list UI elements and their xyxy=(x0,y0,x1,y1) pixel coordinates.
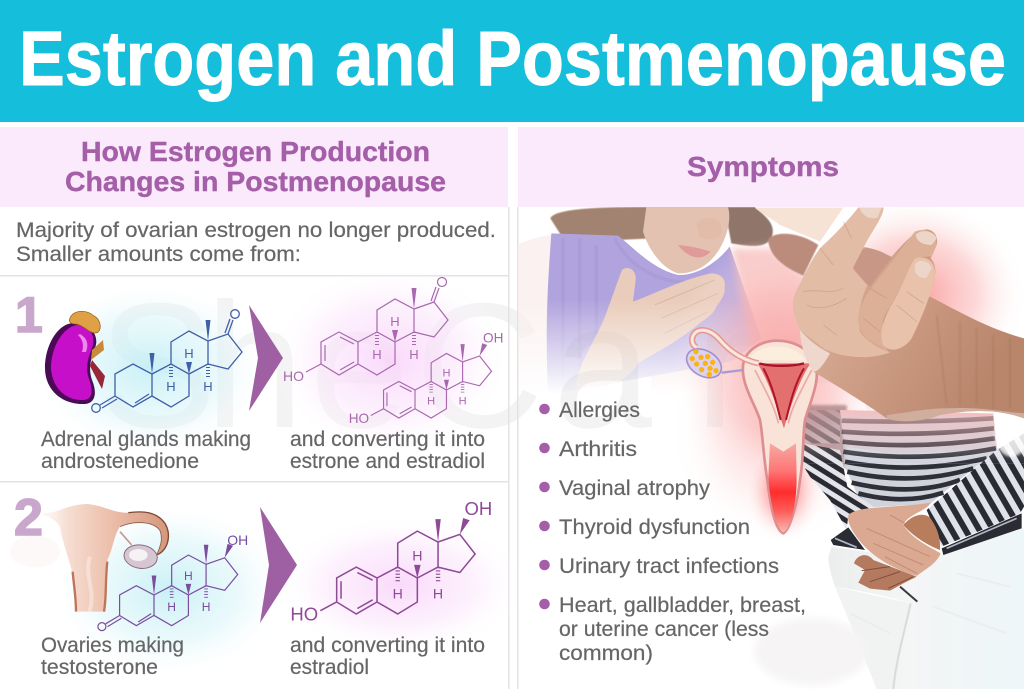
skin wrinkles xyxy=(803,222,923,335)
caption: converting to estradiol: and converting it into xyxy=(290,634,485,657)
title banner xyxy=(0,0,1024,122)
panel: how estrogen production changes xyxy=(0,127,525,689)
palm xyxy=(793,208,890,357)
symptoms list xyxy=(539,399,806,665)
molecule: testosterone: H xyxy=(202,600,210,614)
molecule: estradiol large: H xyxy=(433,587,443,603)
middle finger xyxy=(858,230,936,352)
pale thumb base xyxy=(800,330,830,372)
bullet: cancers xyxy=(539,594,806,665)
nails xyxy=(859,208,937,278)
pale forearm at top xyxy=(755,208,843,242)
heading band: symptoms: Symptoms xyxy=(687,151,839,182)
caption: converting to estrone and estradiol: and converting it into xyxy=(290,428,485,451)
icon: kidney and adrenal gland xyxy=(45,311,105,404)
arrow xyxy=(249,305,283,411)
photo collage xyxy=(518,195,1024,689)
red glow behind hand xyxy=(801,195,1024,395)
intro text: Smaller amounts come from: xyxy=(16,243,301,266)
arrow xyxy=(260,507,297,623)
number 2: 2 xyxy=(14,489,43,547)
heading band left: Changes in Postmenopause xyxy=(65,166,446,197)
woman with scarf xyxy=(518,207,773,395)
step 1 xyxy=(15,265,510,473)
pale lower edge of arm xyxy=(887,408,1024,421)
bullet: allergies: Allergies xyxy=(559,399,640,422)
molecule: testosterone: H xyxy=(184,569,193,583)
heading band left xyxy=(0,127,508,207)
intro text: Majority of ovarian estrogen no longer produced. xyxy=(16,219,496,242)
molecule: estradiol: H xyxy=(427,395,435,407)
step 2 xyxy=(10,489,525,679)
caption: converting to estrone and estradiol xyxy=(290,428,485,473)
watermark: SheCares xyxy=(98,266,949,465)
bullet: cancers: or uterine cancer (less xyxy=(559,618,769,641)
intro text xyxy=(16,219,496,266)
uterus red glow xyxy=(745,440,822,543)
caption: ovaries xyxy=(41,634,184,679)
molecule: estradiol: H xyxy=(442,367,450,379)
large hand with forearm xyxy=(768,208,1024,421)
molecule: estradiol large: HO xyxy=(290,604,318,625)
caption: adrenal glands: Adrenal glands making xyxy=(41,428,251,451)
molecule: testosterone: OH xyxy=(227,532,248,548)
molecule: estradiol xyxy=(349,330,503,426)
white pants xyxy=(828,528,1024,689)
caption: converting to estradiol: estradiol xyxy=(290,656,369,679)
molecule: estrone: HO xyxy=(283,368,304,384)
bullet: urinary tract infections: Urinary tract infections xyxy=(559,555,779,578)
molecule: estradiol large: OH xyxy=(464,498,492,519)
striped torso xyxy=(802,410,1024,555)
pale fade over right arm xyxy=(995,410,1024,457)
molecule: estradiol large: H xyxy=(393,587,403,603)
molecule: estradiol: HO xyxy=(349,411,369,426)
bullet: cancers: common) xyxy=(559,642,653,665)
molecule: estradiol large xyxy=(290,498,492,625)
heading band: symptoms xyxy=(518,127,1024,207)
caption: ovaries: testosterone xyxy=(41,656,158,679)
bullet: thyroid dysfunction: Thyroid dysfunction xyxy=(559,516,750,539)
caption: converting to estradiol xyxy=(290,634,485,679)
clasped hands xyxy=(848,503,941,602)
molecule: androstenedione xyxy=(92,310,242,412)
molecule: androstenedione: H xyxy=(184,346,194,361)
molecule: androstenedione: H xyxy=(166,379,176,394)
striped shirt xyxy=(802,405,1024,689)
panel: symptoms xyxy=(517,127,1024,689)
molecule: estrone: H xyxy=(372,347,382,362)
pink torso base xyxy=(840,410,997,453)
uterus diagram xyxy=(681,330,817,533)
molecule: estradiol: H xyxy=(459,395,467,407)
caption: adrenal glands: androstenedione xyxy=(41,450,199,473)
caption: adrenal glands xyxy=(41,428,251,473)
caption: converting to estrone and estradiol: estrone and estradiol xyxy=(290,450,485,473)
front finger xyxy=(881,257,935,350)
molecule: androstenedione: H xyxy=(203,379,213,394)
number 1: 1 xyxy=(15,287,43,343)
icon: ovary with follicles xyxy=(681,343,726,384)
bullet: vaginal atrophy: Vaginal atrophy xyxy=(559,477,711,500)
heading band left: How Estrogen Production xyxy=(81,136,430,167)
blurred thumb behind hand xyxy=(768,234,818,276)
hand and arm shape xyxy=(793,208,1024,421)
molecule: estrone: H xyxy=(409,347,419,362)
icon: uterus and ovary xyxy=(10,504,168,612)
bottom left soft cloud xyxy=(755,618,868,685)
shadow between arm and torso xyxy=(803,405,847,470)
molecule: estradiol: OH xyxy=(483,330,503,345)
bullet: cancers: Heart, gallbladder, breast, xyxy=(559,594,806,617)
back finger xyxy=(853,248,892,287)
molecule: estrone: H xyxy=(390,314,400,329)
molecule: testosterone: H xyxy=(167,600,176,614)
bullet: arthritis: Arthritis xyxy=(559,438,637,461)
caption: ovaries: Ovaries making xyxy=(41,634,184,657)
molecule: testosterone xyxy=(98,532,248,631)
uterus pink glow xyxy=(731,248,818,358)
molecule: estradiol large: H xyxy=(412,549,422,565)
molecule: estrone xyxy=(283,278,448,384)
